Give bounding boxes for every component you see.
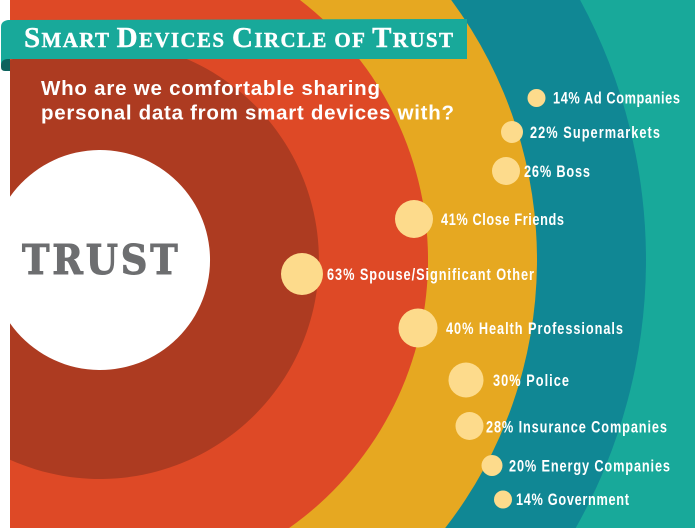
- data point: 20% Energy Companies: 20% Energy Companies: [509, 457, 670, 476]
- data point: 30% Police: [448, 362, 569, 398]
- center label: TRUST: TRUST: [22, 236, 178, 285]
- data point: 14% Government: 14% Government: [516, 490, 629, 510]
- data point: 26% Boss: [492, 157, 590, 185]
- data point: 40% Health Professionals: [398, 308, 623, 348]
- data point: 41% Close Friends: 41% Close Friends: [441, 210, 564, 230]
- data point: 22% Supermarkets: 22% Supermarkets: [530, 123, 660, 143]
- subtitle question: personal data from smart devices with?: [41, 102, 454, 124]
- data point: 28% Insurance Companies: [456, 412, 667, 440]
- title banner: [1, 19, 467, 71]
- subtitle question: [41, 77, 454, 124]
- data point: 26% Boss: 26% Boss: [524, 162, 590, 182]
- data point: 28% Insurance Companies: 28% Insurance Companies: [486, 418, 667, 437]
- data point: 30% Police: 30% Police: [493, 371, 569, 391]
- data point: 41% Close Friends: [395, 200, 564, 238]
- data point: 40% Health Professionals: 40% Health Professionals: [446, 319, 623, 339]
- data point: 63% Spouse/Significant Other: 63% Spouse/Significant Other: [327, 265, 534, 285]
- data point: 14% Ad Companies: 14% Ad Companies: [553, 89, 680, 108]
- subtitle question: Who are we comfortable sharing: [41, 77, 380, 100]
- title text: SMART DEVICES CIRCLE OF TRUST: [24, 22, 453, 54]
- data point: 63% Spouse/Significant Other: [281, 253, 534, 295]
